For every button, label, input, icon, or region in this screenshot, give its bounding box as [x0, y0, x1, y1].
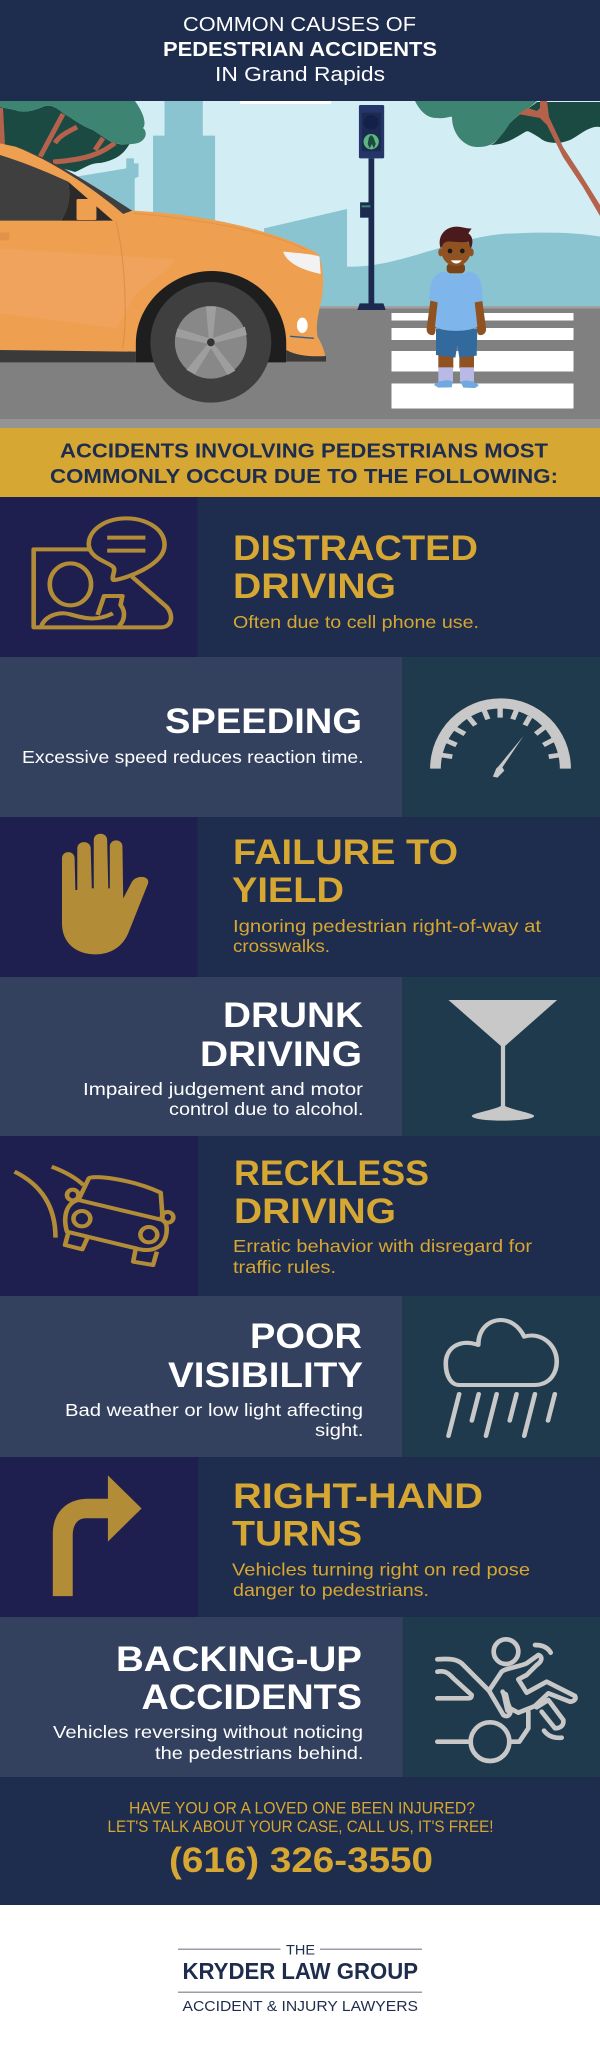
panel: failure to yield: YIELD [232, 871, 344, 910]
icon: person with phone and speech bubble [34, 518, 171, 627]
gold intro banner [0, 428, 600, 498]
panel: backing-up accidents: ACCIDENTS [142, 1678, 362, 1717]
icon: raised hand [62, 834, 148, 954]
panel: distracted driving: DISTRACTED [233, 529, 478, 568]
panel: distracted driving: DRIVING [233, 567, 396, 606]
header title panel: IN Grand Rapids [215, 63, 385, 86]
panel: drunk driving: Impaired judgement and motor [83, 1079, 363, 1099]
gold intro banner: COMMONLY OCCUR DUE TO THE FOLLOWING: [50, 466, 558, 488]
panel: right-hand turns: RIGHT-HAND [233, 1477, 483, 1516]
header title panel: COMMON CAUSES OF [183, 13, 416, 36]
illustration: street scene with car and child at crosswalk [0, 101, 600, 428]
panel: failure to yield: crosswalks. [233, 936, 330, 956]
panel: right-hand turns [0, 1457, 600, 1617]
panel: distracted driving: Often due to cell phone use. [233, 612, 479, 632]
tree left [0, 101, 146, 172]
panel: poor visibility: POOR [250, 1317, 362, 1356]
panel: speeding: SPEEDING [165, 702, 362, 741]
panel: poor visibility [0, 1296, 600, 1457]
panel: drunk driving: DRUNK [223, 996, 363, 1035]
panel: drunk driving [0, 977, 600, 1136]
icon: speedometer [430, 698, 571, 778]
panel: right-hand turns: danger to pedestrians. [233, 1580, 429, 1600]
pedestrian signal [357, 105, 386, 310]
panel: reckless driving [0, 1136, 600, 1296]
logo: The Kryder Law Group [178, 1942, 422, 2015]
panel: distracted driving [0, 497, 600, 657]
panel: backing-up accidents: the pedestrians behind. [155, 1743, 364, 1763]
call to action panel: HAVE YOU OR A LOVED ONE BEEN INJURED? [129, 1800, 475, 1818]
call to action panel: (616) 326-3550 [169, 1841, 433, 1880]
icon: pedestrian struck by car [437, 1639, 575, 1761]
header title panel: PEDESTRIAN ACCIDENTS [163, 38, 437, 61]
panel: backing-up accidents [0, 1617, 600, 1777]
logo: The Kryder Law Group: KRYDER LAW GROUP [182, 1958, 418, 1984]
panel: speeding: Excessive speed reduces reaction time. [22, 747, 364, 767]
child pedestrian [427, 227, 486, 388]
panel: backing-up accidents: Vehicles reversing without noticing [53, 1722, 363, 1742]
icon: swerving car [15, 1167, 173, 1265]
panel: failure to yield: FAILURE TO [233, 833, 458, 872]
panel: drunk driving: control due to alcohol. [169, 1099, 364, 1119]
panel: reckless driving: DRIVING [234, 1192, 396, 1231]
gold intro banner: ACCIDENTS INVOLVING PEDESTRIANS MOST [60, 440, 548, 462]
icon: martini glass [448, 1000, 557, 1121]
panel: poor visibility: VISIBILITY [168, 1356, 363, 1395]
header title panel [0, 0, 600, 101]
road and kerb [0, 306, 600, 428]
crosswalk stripes [392, 313, 574, 408]
panel: drunk driving: DRIVING [200, 1035, 362, 1074]
logo: The Kryder Law Group: THE [286, 1942, 315, 1958]
panel: failure to yield [0, 817, 600, 977]
panel: poor visibility: Bad weather or low light affecting [65, 1400, 363, 1420]
panel: right-hand turns: Vehicles turning right on red pose [232, 1560, 530, 1580]
panel: poor visibility: sight. [315, 1420, 364, 1440]
call to action panel [0, 1777, 600, 1905]
call to action panel: LET'S TALK ABOUT YOUR CASE, CALL US, IT'S FREE! [108, 1818, 494, 1836]
logo: The Kryder Law Group: ACCIDENT & INJURY LAWYERS [182, 1998, 418, 2015]
panel: speeding [0, 657, 600, 817]
icon: right turn arrow [53, 1475, 142, 1596]
panel: reckless driving: Erratic behavior with disregard for [233, 1236, 532, 1256]
panel: right-hand turns: TURNS [232, 1514, 362, 1554]
icon: rain cloud [446, 1320, 557, 1436]
orange car [0, 143, 326, 403]
panel: reckless driving: traffic rules. [233, 1257, 336, 1277]
tree right [415, 101, 600, 216]
panel: failure to yield: Ignoring pedestrian right-of-way at [233, 916, 541, 936]
panel: reckless driving: RECKLESS [234, 1154, 429, 1193]
panel: backing-up accidents: BACKING-UP [116, 1640, 362, 1679]
